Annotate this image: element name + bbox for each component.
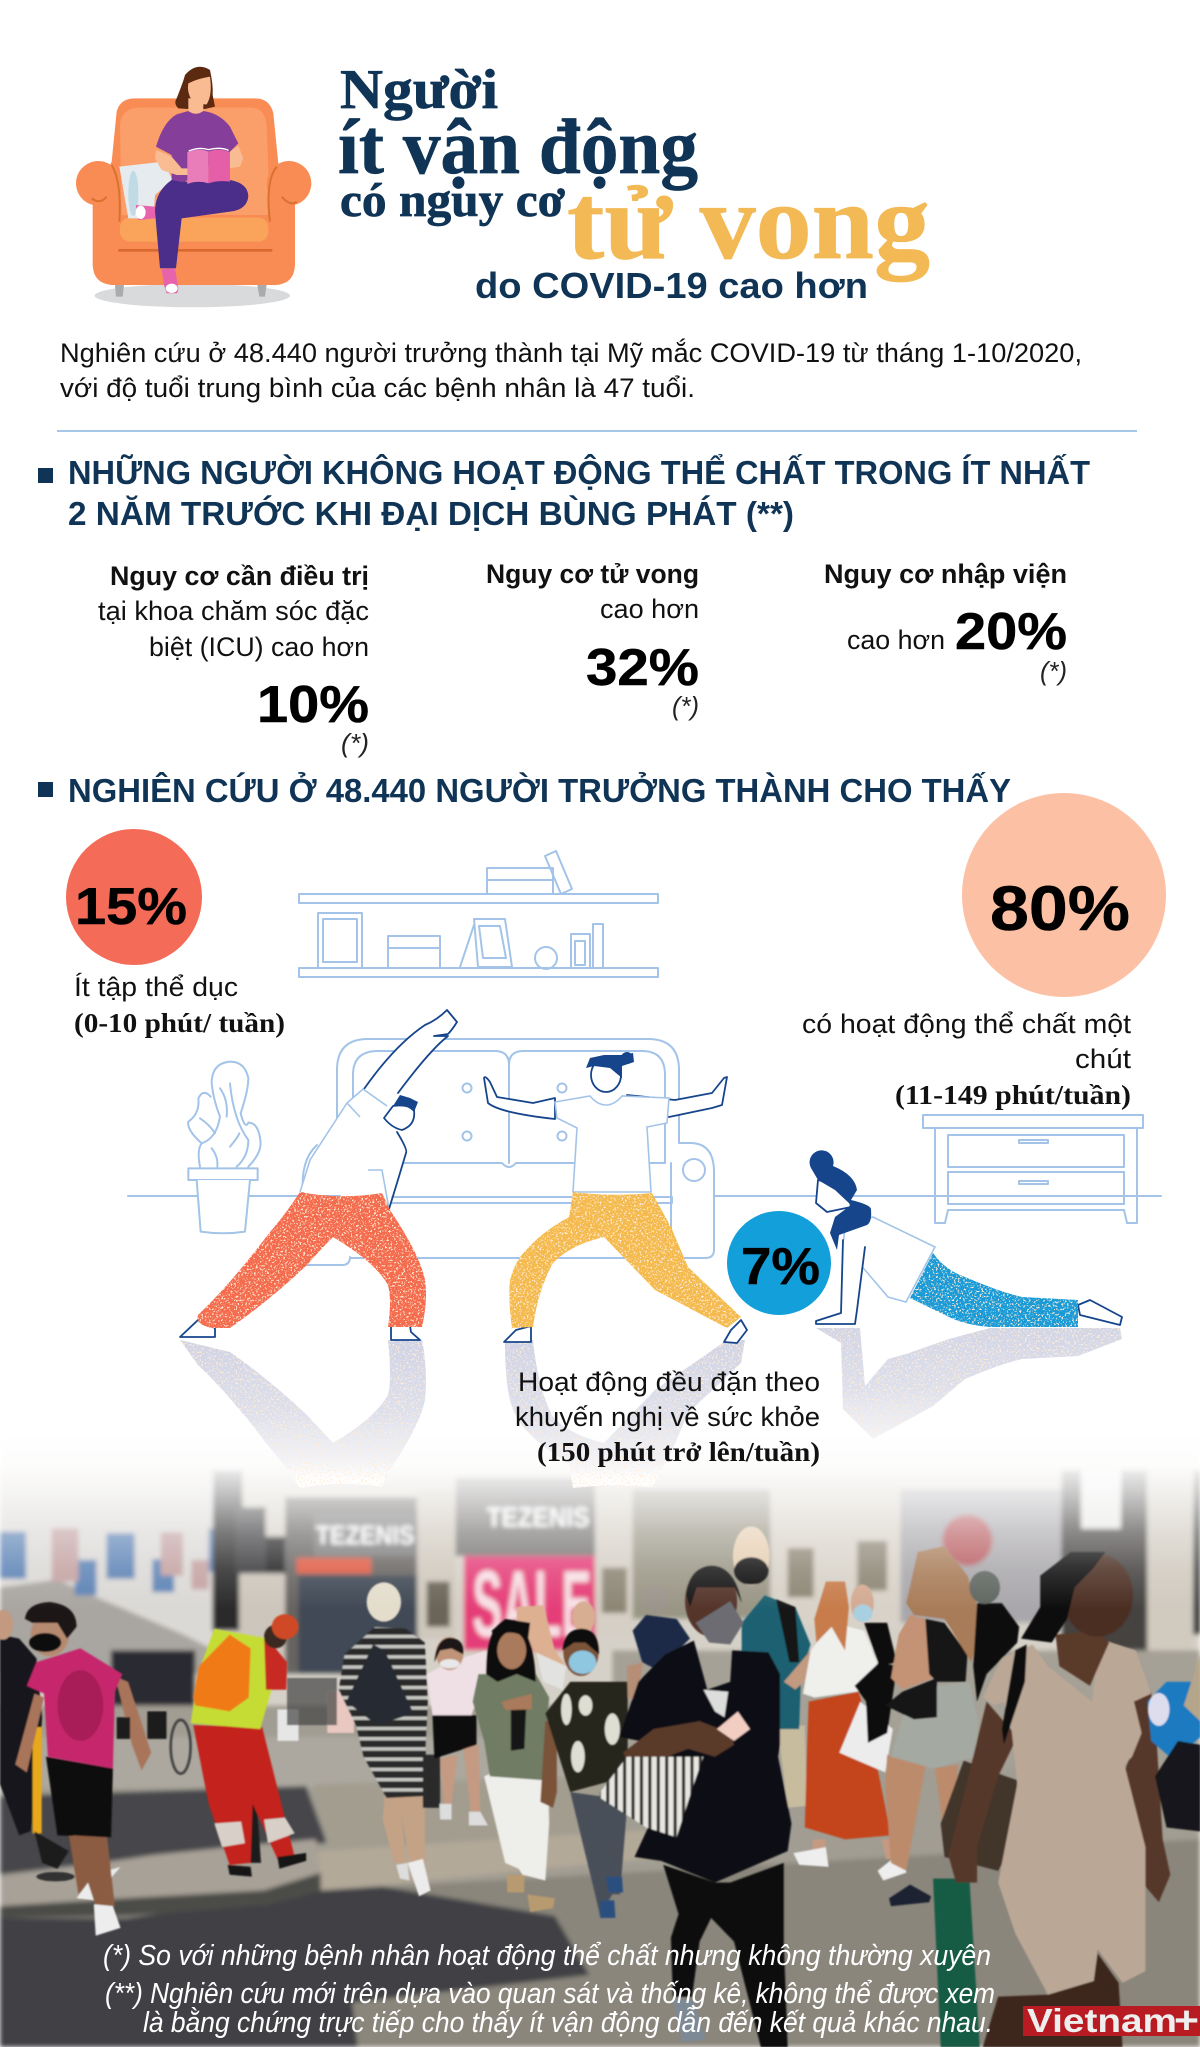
blue car and black bag at right edge (1147, 1654, 1200, 1831)
person: small man with blue mask (851, 1584, 897, 1666)
heading: section 1: NHỮNG NGƯỜI KHÔNG HOẠT ĐỘNG THỂ CHẤT TRONG ÍT NHẤT (68, 453, 1090, 491)
label: low activity (74, 972, 285, 1038)
label: low activity: (0-10 phút/ tuần) (74, 1008, 285, 1038)
illustration: sofa (128, 1039, 1161, 1265)
photo top fade to white (0, 1425, 1200, 1610)
heading: section 1 (38, 453, 1090, 532)
title: do COVID-19 cao hơn (475, 265, 868, 306)
heading: section 2: NGHIÊN CỨU Ở 48.440 NGƯỜI TRƯỞNG THÀNH CHO THẤY (68, 772, 1011, 809)
title (338, 59, 930, 306)
label: regular activity (515, 1367, 820, 1467)
person: woman with long hair, grey skirt and shoulder bag (839, 1546, 983, 1906)
person: boy in pink tie-dye shirt (15, 1602, 151, 1936)
label: some activity: có hoạt động thể chất một (802, 1009, 1132, 1039)
label: some activity: chút (1075, 1044, 1132, 1074)
floor reflection: woman in yellow trousers (505, 1340, 745, 1488)
stat circle: 80% (962, 793, 1166, 997)
title: tử vong (567, 163, 930, 282)
stat circle: 80%: 80% (990, 874, 1130, 944)
icon: woman reading in armchair (76, 67, 311, 307)
footnotes: (*) So với những bệnh nhân hoạt động thể chất nhưng không thường xuyên (103, 1940, 991, 1972)
stat: ICU risk 10%: tại khoa chăm sóc đặc (98, 596, 369, 626)
photo: pedestrians in masks on a city street: TEZENIS (487, 1501, 589, 1532)
figure: woman doing push-up in blue trousers (810, 1150, 1122, 1327)
stat: death risk 32%: 32% (586, 639, 699, 697)
label: regular activity: (150 phút trở lên/tuần) (537, 1437, 820, 1467)
logo: Vietnam+ (1023, 2000, 1200, 2042)
stat: ICU risk 10%: 10% (257, 676, 369, 734)
figure: stretching man in red trousers (180, 1010, 457, 1340)
title: có nguy cơ (340, 174, 565, 227)
stat: hospitalisation risk 20% (824, 559, 1067, 686)
person: woman in striped dress with backpack (339, 1582, 440, 1896)
person: woman in green jacket and white trousers (473, 1619, 555, 1912)
stat circle: 15%: 15% (75, 878, 187, 936)
stat: ICU risk 10% (98, 561, 369, 758)
label: some activity: (11-149 phút/tuần) (895, 1080, 1131, 1110)
figure: woman in yellow trousers with arms outstretched (484, 1052, 747, 1343)
person: woman in black and white blouse with blue mask (540, 1629, 628, 1918)
intro text (60, 337, 1082, 403)
intro text: Nghiên cứu ở 48.440 người trưởng thành tại Mỹ mắc COVID-19 từ tháng 1-10/2020, (60, 337, 1082, 368)
stat: hospitalisation risk 20%: (*) (1040, 656, 1067, 686)
heading: section 1: 2 NĂM TRƯỚC KHI ĐẠI DỊCH BÙNG PHÁT (**) (68, 495, 794, 532)
person: woman in floral top and black shorts (427, 1637, 488, 1825)
person: man in dark clothes at left edge (0, 1610, 42, 1835)
footnotes: (**) Nghiên cứu mới trên dựa vào quan sát và thống kê, không thể được xem (105, 1978, 995, 2010)
stat: hospitalisation risk 20%: 20% (955, 603, 1067, 661)
stat circle: 15% (66, 829, 202, 965)
person: man in teal T-shirt with black mask (733, 1526, 812, 1808)
stat circle: 7%: 7% (741, 1238, 820, 1296)
stat: death risk 32% (486, 559, 699, 721)
stat: ICU risk 10%: Nguy cơ cần điều trị (110, 561, 369, 591)
photo: pedestrians in masks on a city street: SALE (473, 1551, 591, 1657)
background shopping bags (117, 1678, 354, 1741)
person: street worker in high-vis vest and red trousers (171, 1614, 306, 1877)
photo: pedestrians in masks on a city street (0, 1430, 1200, 2047)
person: man in navy shirt behind (627, 1585, 690, 1702)
footnotes: là bằng chứng trực tiếp cho thấy ít vận động dẫn đến kết quả khác nhau. (143, 2006, 993, 2039)
intro text: với độ tuổi trung bình của các bệnh nhân là 47 tuổi. (60, 373, 695, 403)
label: regular activity: Hoạt động đều đặn theo (518, 1367, 820, 1397)
label: some activity (802, 1009, 1132, 1110)
person: woman in white top and red skirt (793, 1581, 906, 1881)
stat: death risk 32%: Nguy cơ tử vong (486, 559, 699, 589)
stat: death risk 32%: cao hơn (600, 594, 699, 624)
illustration: wall shelves (299, 851, 658, 977)
label: regular activity: khuyến nghị về sức khỏe (515, 1402, 820, 1432)
logo: Vietnam+: Vietnam (1027, 2002, 1177, 2039)
photo: pedestrians in masks on a city street: TEZENIS (316, 1522, 414, 1550)
footnotes (103, 1940, 995, 2039)
person: man in black with grey hat behind (969, 1571, 1019, 1702)
person: women behind the crowd (517, 1601, 595, 1690)
stat: hospitalisation risk 20%: cao hơn (847, 625, 945, 655)
logo: Vietnam+: + (1174, 2000, 1199, 2042)
person: right foreground woman in beige dress (933, 1552, 1170, 2047)
stat circle: 7% (727, 1211, 831, 1315)
title: ít vận động (338, 103, 698, 190)
floor reflection: stretching man (180, 1340, 426, 1488)
person: central woman in black with plaid mask and striped bag (600, 1566, 791, 2047)
label: low activity: Ít tập thể dục (74, 972, 238, 1002)
floor reflection: woman doing push-up (816, 1328, 1122, 1439)
stat: ICU risk 10%: (*) (341, 728, 369, 758)
title: Người (340, 59, 498, 121)
illustration: potted plant (188, 1062, 261, 1233)
stat: death risk 32%: (*) (672, 691, 699, 721)
stat: ICU risk 10%: biệt (ICU) cao hơn (149, 632, 369, 662)
bollard (33, 1727, 75, 1881)
illustration: chest of drawers (923, 1115, 1143, 1223)
stat: hospitalisation risk 20%: Nguy cơ nhập viện (824, 559, 1067, 589)
